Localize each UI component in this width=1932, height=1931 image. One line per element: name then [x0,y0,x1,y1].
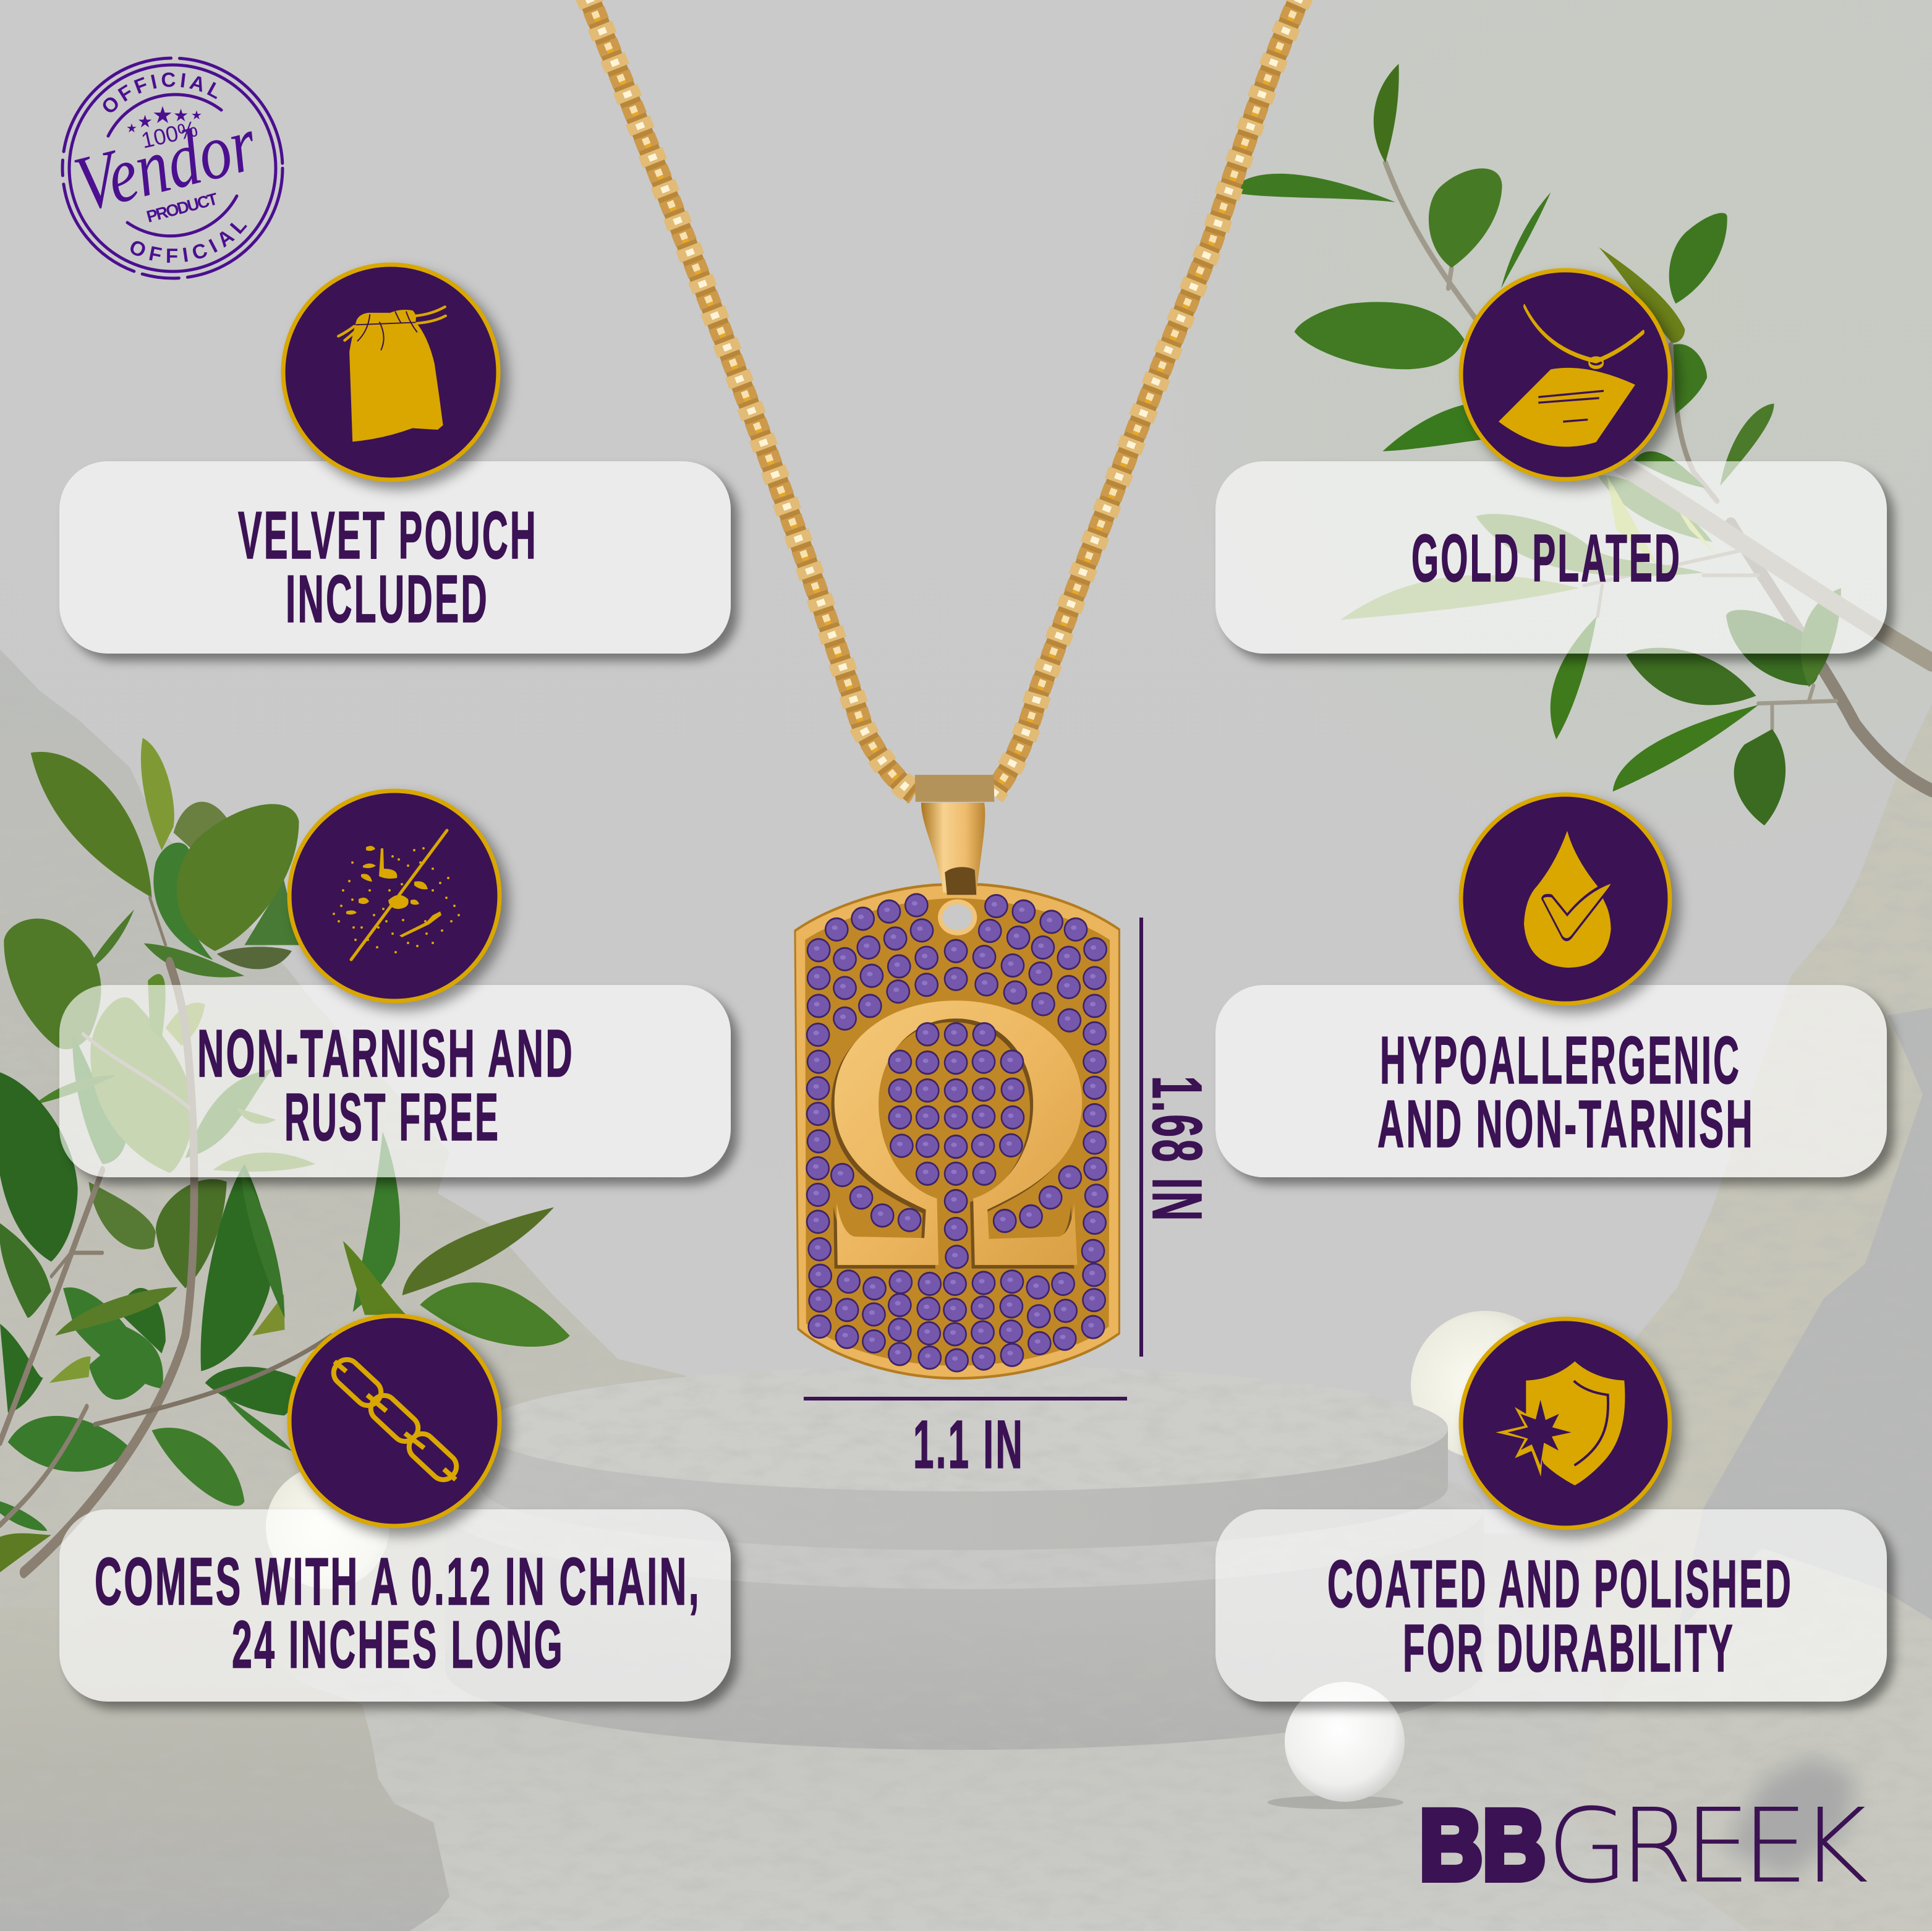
right plant [1240,64,1932,825]
text: non-tarnish and rust free: NON-TARNISH AND [197,1016,574,1091]
panel: hypoallergenic and non-tarnish [1215,793,1900,1191]
bail [915,775,994,936]
text: coated and polished for durability [1327,1546,1793,1686]
stamp: official 100% vendor product: Vendor [66,99,265,228]
pill background [1215,461,1887,654]
necklace chain: right strand [992,0,1301,795]
back sphere [1411,1311,1559,1459]
text: comes with a 0.12 in chain: 24 INCHES LONG [232,1607,564,1682]
pendant plate [795,885,1119,1378]
stamp: official 100% vendor product [61,57,284,279]
text: non-tarnish and rust free: RUST FREE [284,1080,500,1155]
dimension: width 1.1 IN: 1.1 IN [913,1407,1024,1483]
icon: necklace tag [1461,270,1670,479]
pill background [1215,1509,1887,1702]
dimension: height 1.68 IN: 1.68 IN [1138,1076,1216,1223]
stamp: official 100% vendor product: ★ [126,121,137,135]
omega symbol [835,1000,1082,1265]
left plant [0,738,570,1572]
icon: rust splatter with slash [289,791,500,1001]
stamp: official 100% vendor product: OFFICIAL [130,223,247,263]
panel: gold plated [1215,268,1900,667]
logo: BB GREEK: BB [1419,1789,1546,1900]
pendant [795,775,1119,1378]
left sphere [266,1465,389,1589]
logo: BB GREEK: GREEK [1547,1787,1867,1906]
necklace chain: left strand [587,0,915,795]
front bottom-right boulder [1573,1548,1932,1931]
icon: velvet pouch [283,265,498,480]
icon: chain links [289,1316,500,1526]
panel: comes with chain [59,1313,744,1715]
stamp: official 100% vendor product: ★ [191,108,202,122]
panel: velvet pouch included [59,262,744,667]
right rock formation [1583,704,1932,1731]
stamp: official 100% vendor product: ★ [173,105,189,126]
icon: drop with check [1461,795,1670,1004]
stamp: official 100% vendor product: 100% [139,116,200,153]
stamp: official 100% vendor product: ★ [152,101,173,129]
text: comes with a 0.12 in chain [95,1544,701,1682]
lower pedestal disc [445,1428,1484,1750]
text: velvet pouch included: VELVET POUCH [238,498,538,573]
pill background [1215,985,1887,1177]
icon: shield with impact star [1461,1319,1670,1528]
text: hypoallergenic and non-tarnish [1377,1023,1755,1162]
front sphere [1267,1682,1405,1809]
pill background [59,1509,731,1702]
upper pedestal disc [481,1365,1448,1550]
floor [0,1533,1932,1931]
boulder shadow [1725,1756,1855,1880]
panel: coated and polished [1215,1317,1900,1716]
omega shadow [832,1004,1079,1269]
stamp: official 100% vendor product: PRODUCT [145,189,220,226]
panel: non-tarnish and rust free [59,789,744,1191]
text: gold plated: GOLD PLATED [1411,521,1682,596]
stamp: official 100% vendor product: ★ [137,111,153,132]
pill background [59,985,731,1177]
text: velvet pouch included: INCLUDED [286,561,489,637]
bottom-left boulder [0,1608,449,1931]
text: velvet pouch included [238,498,538,637]
text: comes with a 0.12 in chain: COMES WITH A 0.12 IN CHAIN, [95,1544,701,1619]
purple crystals [806,893,1109,1373]
text: non-tarnish and rust free [197,1016,574,1155]
dimension: height 1.68 IN [1138,918,1216,1357]
pill background [59,461,731,654]
stamp: official 100% vendor product: OFFICIAL [103,72,218,113]
greenish haze behind right plant [1051,0,1932,927]
left rock formation [0,649,686,1731]
dimension: width 1.1 IN [804,1397,1127,1483]
logo: BB GREEK [1419,1787,1867,1906]
